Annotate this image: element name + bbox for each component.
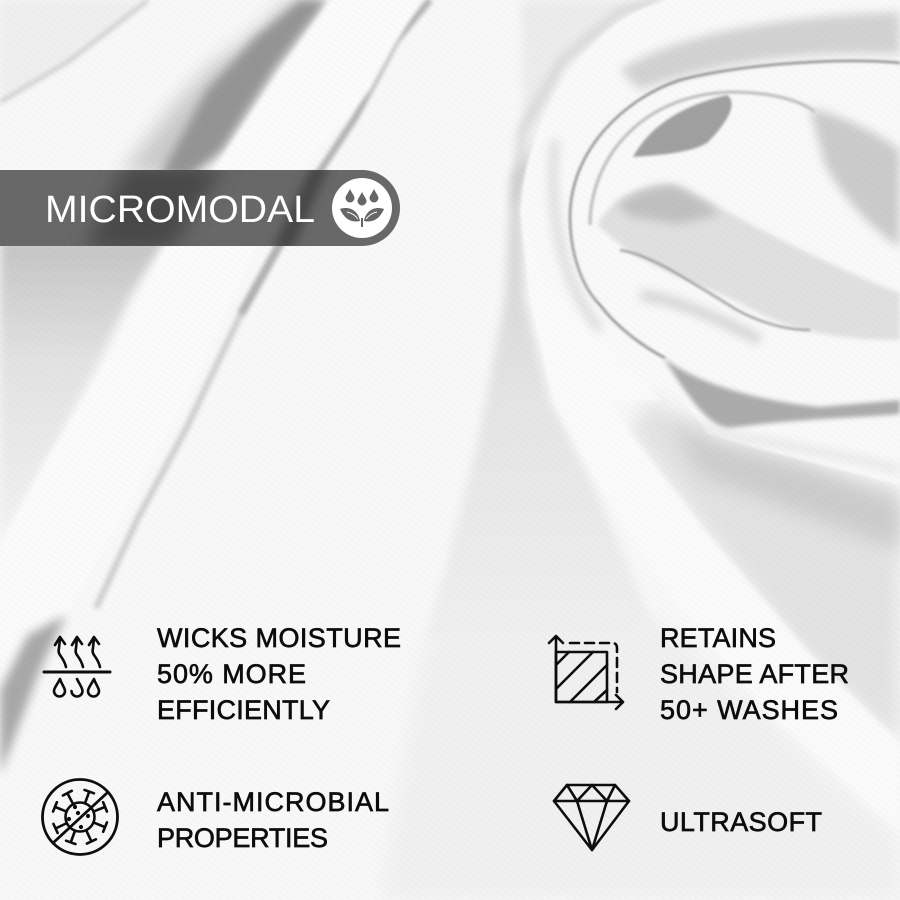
lower lip (693, 423, 900, 470)
text: anti-microbial: ANTI-MICROBIAL (157, 787, 389, 817)
crease along second fold (96, 0, 430, 608)
bottom-left shadow (0, 615, 66, 775)
feature: anti-microbial (42, 780, 389, 854)
bright diagonal strip (218, 2, 415, 168)
top-left pale area and crease (5, 4, 128, 90)
right shade (810, 108, 900, 248)
lower pocket shadow (663, 357, 900, 428)
feature: retains shape (549, 623, 849, 725)
shadow band top of roll (620, 12, 900, 90)
inner roll line (570, 61, 900, 358)
icon: crossed-out virus (42, 780, 118, 854)
icon: diamond (554, 785, 629, 850)
text: wicks moisture: WICKS MOISTURE (157, 623, 401, 653)
text: ultrasoft: ULTRASOFT (660, 807, 822, 837)
text: wicks moisture: EFFICIENTLY (157, 695, 330, 725)
top-right outer ground (523, 2, 620, 132)
text: retains shape: RETAINS (660, 623, 776, 653)
feature: wicks moisture (44, 623, 401, 725)
icon: moisture wicking (44, 637, 110, 696)
gray region right of the strip (630, 400, 900, 745)
gray region left of the roll strip (434, 148, 641, 630)
dark wedge fold top centre (120, 0, 327, 175)
text: retains shape: 50+ WASHES (660, 695, 838, 725)
dark inner pocket (633, 95, 732, 157)
text: retains shape: SHAPE AFTER (660, 659, 849, 689)
banner: MICROMODAL (0, 170, 400, 246)
banner heading: MICROMODAL (45, 189, 315, 231)
feature: ultrasoft (554, 785, 822, 850)
roll (521, 0, 900, 485)
inner woven fold (598, 184, 900, 340)
icon: water drops and leaves (332, 178, 392, 238)
gray area under the banner (0, 246, 164, 512)
text: anti-microbial: PROPERTIES (157, 823, 328, 853)
banner background (0, 170, 400, 246)
text: wicks moisture: 50% MORE (157, 659, 306, 689)
bright lower strip (634, 443, 889, 738)
icon: shape retention (549, 636, 623, 709)
